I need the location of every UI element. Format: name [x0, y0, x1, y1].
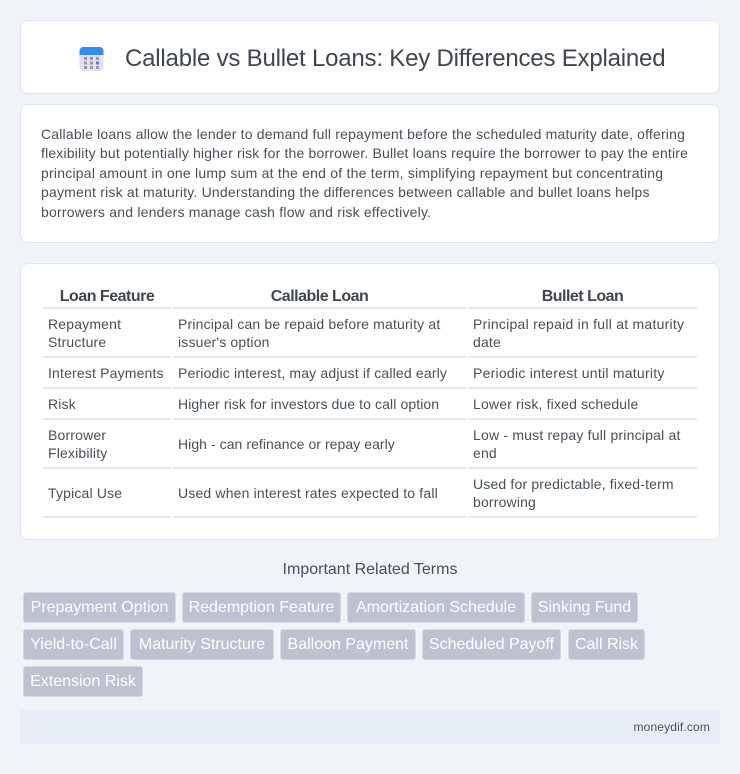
- tag: [347, 592, 525, 623]
- intro text: payment risk at maturity. Understanding the differences between callable and bullet loans helps: [41, 184, 650, 200]
- tag: [531, 592, 638, 623]
- tag: Yield-to-Call: [30, 636, 117, 653]
- row: borrower flexibility: [43, 418, 697, 461]
- table headers: Loan Feature: [60, 288, 154, 305]
- row: interest payments: Periodic interest until maturity: [473, 365, 665, 381]
- row: borrower flexibility: Low - must repay full principal at: [473, 427, 681, 443]
- row: risk: Lower risk, fixed schedule: [473, 396, 638, 412]
- row: repayment structure: issuer's option: [178, 334, 270, 350]
- intro text: Callable loans allow the lender to demand full repayment before the scheduled maturity date, offering: [41, 126, 685, 142]
- tag: [130, 629, 274, 660]
- tag: [182, 592, 341, 623]
- tag: Maturity Structure: [139, 636, 265, 653]
- row: risk: Higher risk for investors due to call option: [178, 396, 439, 412]
- related terms heading: Important Related Terms: [283, 561, 457, 578]
- tag: [280, 629, 416, 660]
- row: interest payments: Interest Payments: [48, 365, 164, 381]
- table headers: Bullet Loan: [542, 288, 623, 305]
- tag: Prepayment Option: [31, 599, 168, 616]
- row: risk: [43, 387, 697, 412]
- row: typical use: borrowing: [473, 494, 536, 510]
- row: typical use: Used for predictable, fixed-term: [473, 476, 674, 492]
- tag: Amortization Schedule: [356, 599, 516, 616]
- row: repayment structure: Structure: [48, 334, 106, 350]
- table headers: Callable Loan: [271, 288, 368, 305]
- row: borrower flexibility: end: [473, 445, 497, 461]
- row: risk: Risk: [48, 396, 76, 412]
- tag: [568, 629, 645, 660]
- row: repayment structure: [43, 307, 697, 350]
- tag: [422, 629, 561, 660]
- row: borrower flexibility: Flexibility: [48, 445, 107, 461]
- row: repayment structure: Principal repaid in full at maturity: [473, 316, 684, 332]
- title panel: [20, 20, 720, 94]
- tag: [23, 629, 124, 660]
- title: Callable vs Bullet Loans: Key Differences Explained: [125, 45, 665, 72]
- intro panel: [20, 104, 720, 243]
- tag: Redemption Feature: [189, 599, 334, 616]
- footer bar: [20, 710, 720, 744]
- tag: Sinking Fund: [538, 599, 631, 616]
- row: interest payments: Periodic interest, may adjust if called early: [178, 365, 447, 381]
- row: repayment structure: Repayment: [48, 316, 121, 332]
- tag: Call Risk: [575, 636, 638, 653]
- intro text: [41, 126, 688, 220]
- tag: Extension Risk: [30, 673, 136, 690]
- row: interest payments: [43, 356, 697, 381]
- intro text: borrowers and lenders manage cash flow and risk effectively.: [41, 204, 431, 220]
- intro text: flexibility but potentially higher risk for the borrower. Bullet loans require the borrower to pay the entire: [41, 145, 688, 161]
- row: repayment structure: date: [473, 334, 501, 350]
- tag: [23, 666, 143, 697]
- source: moneydif.com: [634, 720, 710, 734]
- icon: calendar: [80, 47, 104, 71]
- tag: Scheduled Payoff: [429, 636, 554, 653]
- tag: [23, 592, 176, 623]
- row: borrower flexibility: Borrower: [48, 427, 106, 443]
- related terms tags: [23, 592, 645, 697]
- row: typical use: [43, 467, 697, 518]
- row: borrower flexibility: High - can refinance or repay early: [178, 436, 395, 452]
- comparison table panel: [20, 263, 720, 540]
- tag: Balloon Payment: [288, 636, 408, 653]
- row: typical use: Typical Use: [48, 485, 122, 501]
- intro text: principal amount in one lump sum at the end of the term, simplifying repayment but concentrating: [41, 165, 663, 181]
- row: typical use: Used when interest rates expected to fall: [178, 485, 438, 501]
- row: repayment structure: Principal can be repaid before maturity at: [178, 316, 440, 332]
- table headers: [60, 288, 623, 305]
